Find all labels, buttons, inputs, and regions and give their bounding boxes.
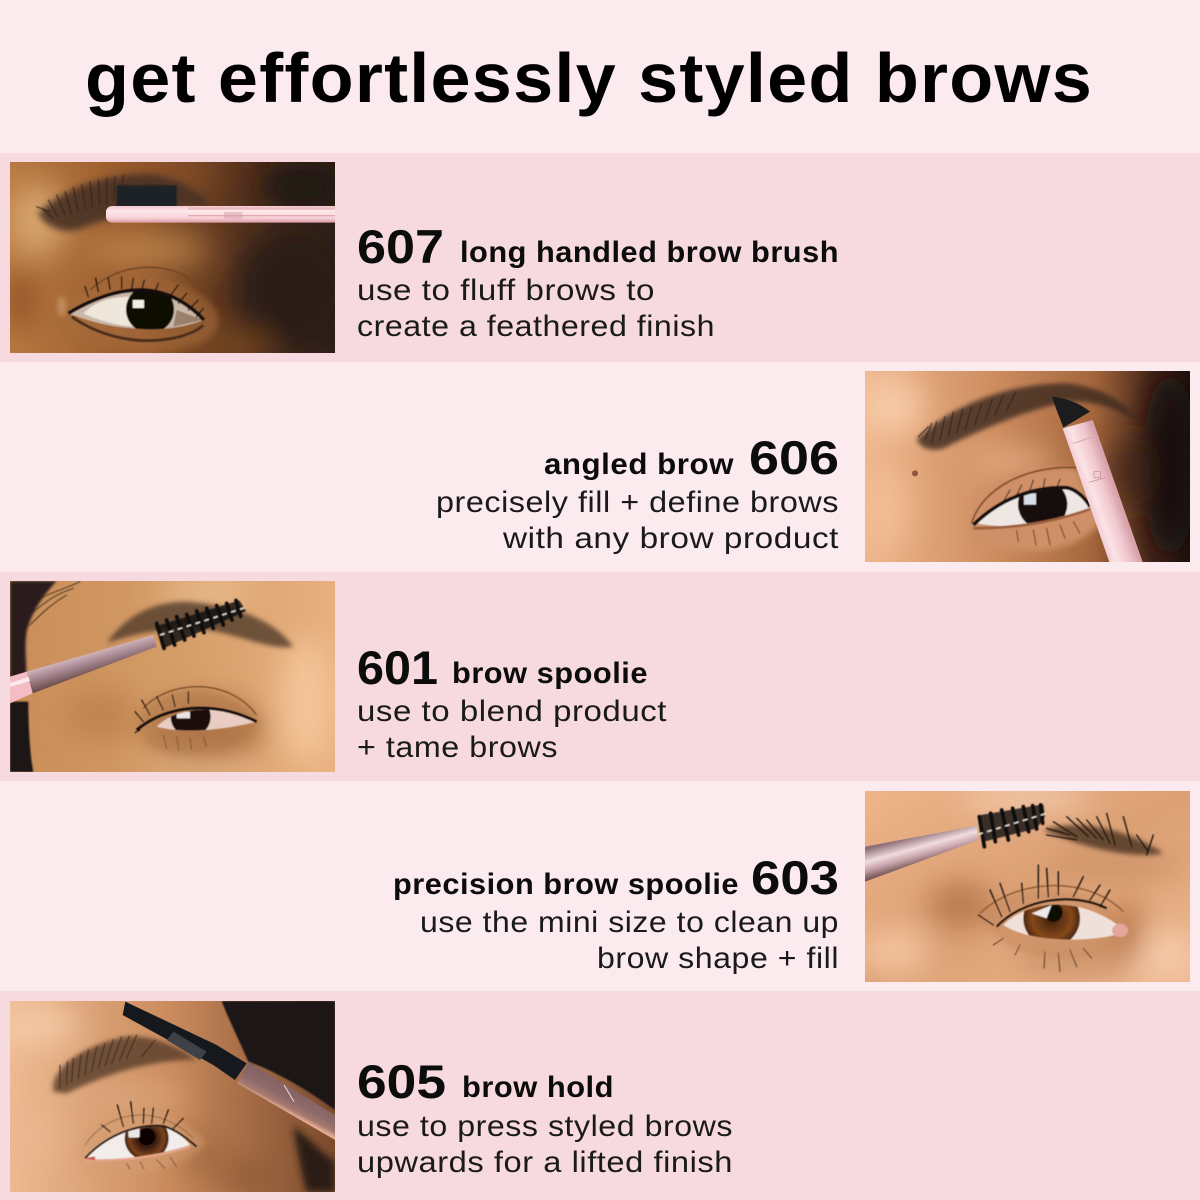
caption: 605: use to press styled brows bbox=[357, 1110, 733, 1143]
brush bristles bbox=[117, 185, 177, 207]
photo: 601 brow spoolie on eye bbox=[10, 581, 335, 772]
eye bbox=[135, 687, 260, 754]
caption: 607: 607 bbox=[357, 220, 444, 273]
caption: 601: brow spoolie bbox=[452, 657, 648, 690]
caption: 601: + tame brows bbox=[357, 731, 558, 764]
caption: 606: precisely fill + define brows bbox=[436, 486, 839, 519]
eyebrow bbox=[917, 383, 1140, 450]
caption: 607: use to fluff brows to bbox=[357, 274, 655, 307]
caption: 605: brow hold bbox=[462, 1071, 614, 1104]
caption: 606: 606 bbox=[749, 431, 839, 484]
hair at right bbox=[222, 1001, 335, 1110]
photo: 605 brow hold on eye bbox=[10, 1001, 335, 1192]
eyebrow bbox=[1043, 813, 1163, 855]
eyebrow bbox=[53, 1035, 197, 1093]
photo: 603 precision brow spoolie on eye bbox=[865, 791, 1190, 982]
caption: 605: 605 bbox=[357, 1055, 446, 1108]
caption: 603 bbox=[393, 851, 839, 975]
eye bbox=[50, 267, 219, 353]
caption: 601 bbox=[357, 641, 667, 764]
title band bbox=[0, 0, 1200, 153]
caption: 601: use to blend product bbox=[357, 695, 667, 728]
hair at left bbox=[10, 581, 80, 772]
caption: 605: upwards for a lifted finish bbox=[357, 1146, 733, 1179]
mole bbox=[912, 470, 918, 476]
row band 5 bbox=[0, 991, 1200, 1200]
spoolie handle bbox=[10, 635, 157, 703]
title: get effortlessly styled brows bbox=[85, 39, 1093, 117]
brush handle bbox=[106, 206, 346, 223]
caption: 607: create a feathered finish bbox=[357, 310, 715, 343]
caption: 606 bbox=[436, 431, 839, 555]
caption: 606: angled brow bbox=[544, 448, 734, 481]
angled brush bbox=[1052, 397, 1143, 562]
eye bbox=[967, 467, 1100, 551]
caption: 605 bbox=[357, 1055, 733, 1179]
brow hold tool bbox=[123, 1002, 335, 1140]
eyebrow bbox=[37, 174, 213, 231]
caption: 606: with any brow product bbox=[502, 522, 839, 555]
caption: 603: precision brow spoolie bbox=[393, 868, 739, 901]
caption: 607: long handled brow brush bbox=[460, 236, 839, 269]
row band 4 bbox=[0, 781, 1200, 991]
spoolie bbox=[977, 804, 1047, 847]
photo: 607 long handled brow brush on eye bbox=[10, 162, 335, 353]
spoolie handle bbox=[865, 826, 978, 882]
row band 2 bbox=[0, 362, 1200, 572]
row band 1 bbox=[0, 153, 1200, 362]
row band 3 bbox=[0, 572, 1200, 781]
eye bbox=[77, 1102, 207, 1174]
caption: 603: brow shape + fill bbox=[597, 942, 839, 975]
caption: 603: 603 bbox=[751, 851, 839, 904]
eyebrow bbox=[107, 602, 293, 647]
spoolie bbox=[155, 600, 246, 648]
eye bbox=[977, 865, 1137, 972]
caption: 607 bbox=[357, 220, 839, 343]
photo: 606 angled brow on eye bbox=[865, 371, 1190, 562]
caption: 603: use the mini size to clean up bbox=[420, 906, 839, 939]
caption: 601: 601 bbox=[357, 641, 438, 694]
